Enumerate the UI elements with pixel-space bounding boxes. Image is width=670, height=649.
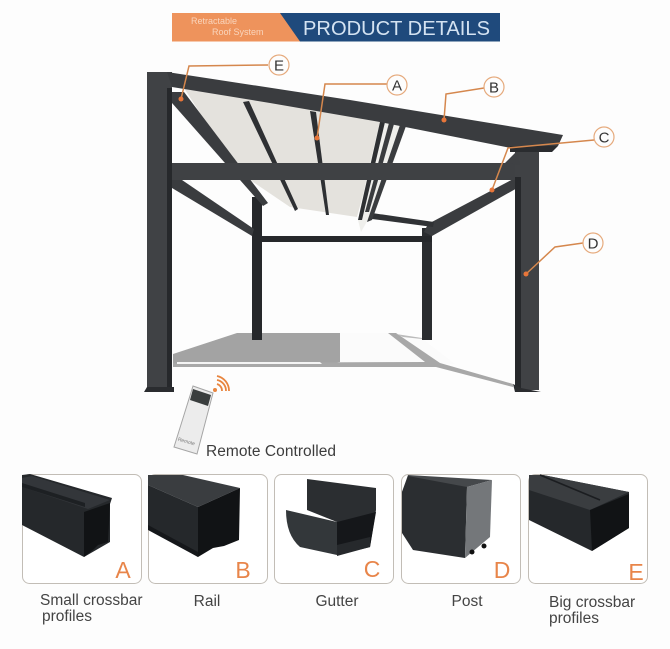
panel: profile C <box>274 474 394 584</box>
retractable canvas roof <box>184 88 382 217</box>
letter D: D <box>494 557 510 583</box>
title banner: Roof System <box>212 27 264 37</box>
callout B <box>442 77 504 122</box>
letter B: B <box>235 557 251 583</box>
sloped roof beam <box>167 72 563 148</box>
roof rafters <box>172 92 406 232</box>
caption E: profiles <box>549 610 599 627</box>
icon: remote control <box>174 386 213 454</box>
icon: wireless signal <box>213 376 229 392</box>
caption E: Big crossbar <box>549 594 635 611</box>
callout E: E <box>274 58 284 74</box>
caption D: Post <box>451 593 483 610</box>
lower diagonal rafters <box>172 177 519 236</box>
callout C: C <box>599 130 610 146</box>
pergola frame <box>144 72 563 392</box>
ground shadow <box>173 333 513 387</box>
callout B: B <box>489 80 499 96</box>
letter C: C <box>364 556 380 582</box>
callout E <box>178 55 289 102</box>
right post <box>505 150 541 392</box>
panel: profile E <box>528 474 648 585</box>
callout C <box>490 127 614 192</box>
callout A: A <box>392 78 402 94</box>
panel: profile B <box>148 474 268 584</box>
icon: remote control: Remote <box>177 437 196 447</box>
left post <box>144 72 174 392</box>
callout D <box>524 233 603 276</box>
title banner: PRODUCT DETAILS <box>303 17 490 40</box>
title banner: Retractable <box>191 16 237 26</box>
caption C: Gutter <box>315 593 359 610</box>
rear posts and beam <box>252 197 432 340</box>
letter E: E <box>628 559 644 585</box>
caption A: Small crossbar <box>40 592 142 609</box>
callout A <box>314 75 407 140</box>
caption A: profiles <box>42 608 92 625</box>
letter A: A <box>115 557 131 583</box>
remote controlled label: Remote Controlled <box>206 443 336 460</box>
callout D: D <box>588 236 599 252</box>
caption B: Rail <box>194 593 220 610</box>
panel: profile D <box>402 474 520 584</box>
middle crossbar <box>172 163 520 180</box>
panel: profile A <box>22 474 142 584</box>
title banner <box>172 13 500 42</box>
